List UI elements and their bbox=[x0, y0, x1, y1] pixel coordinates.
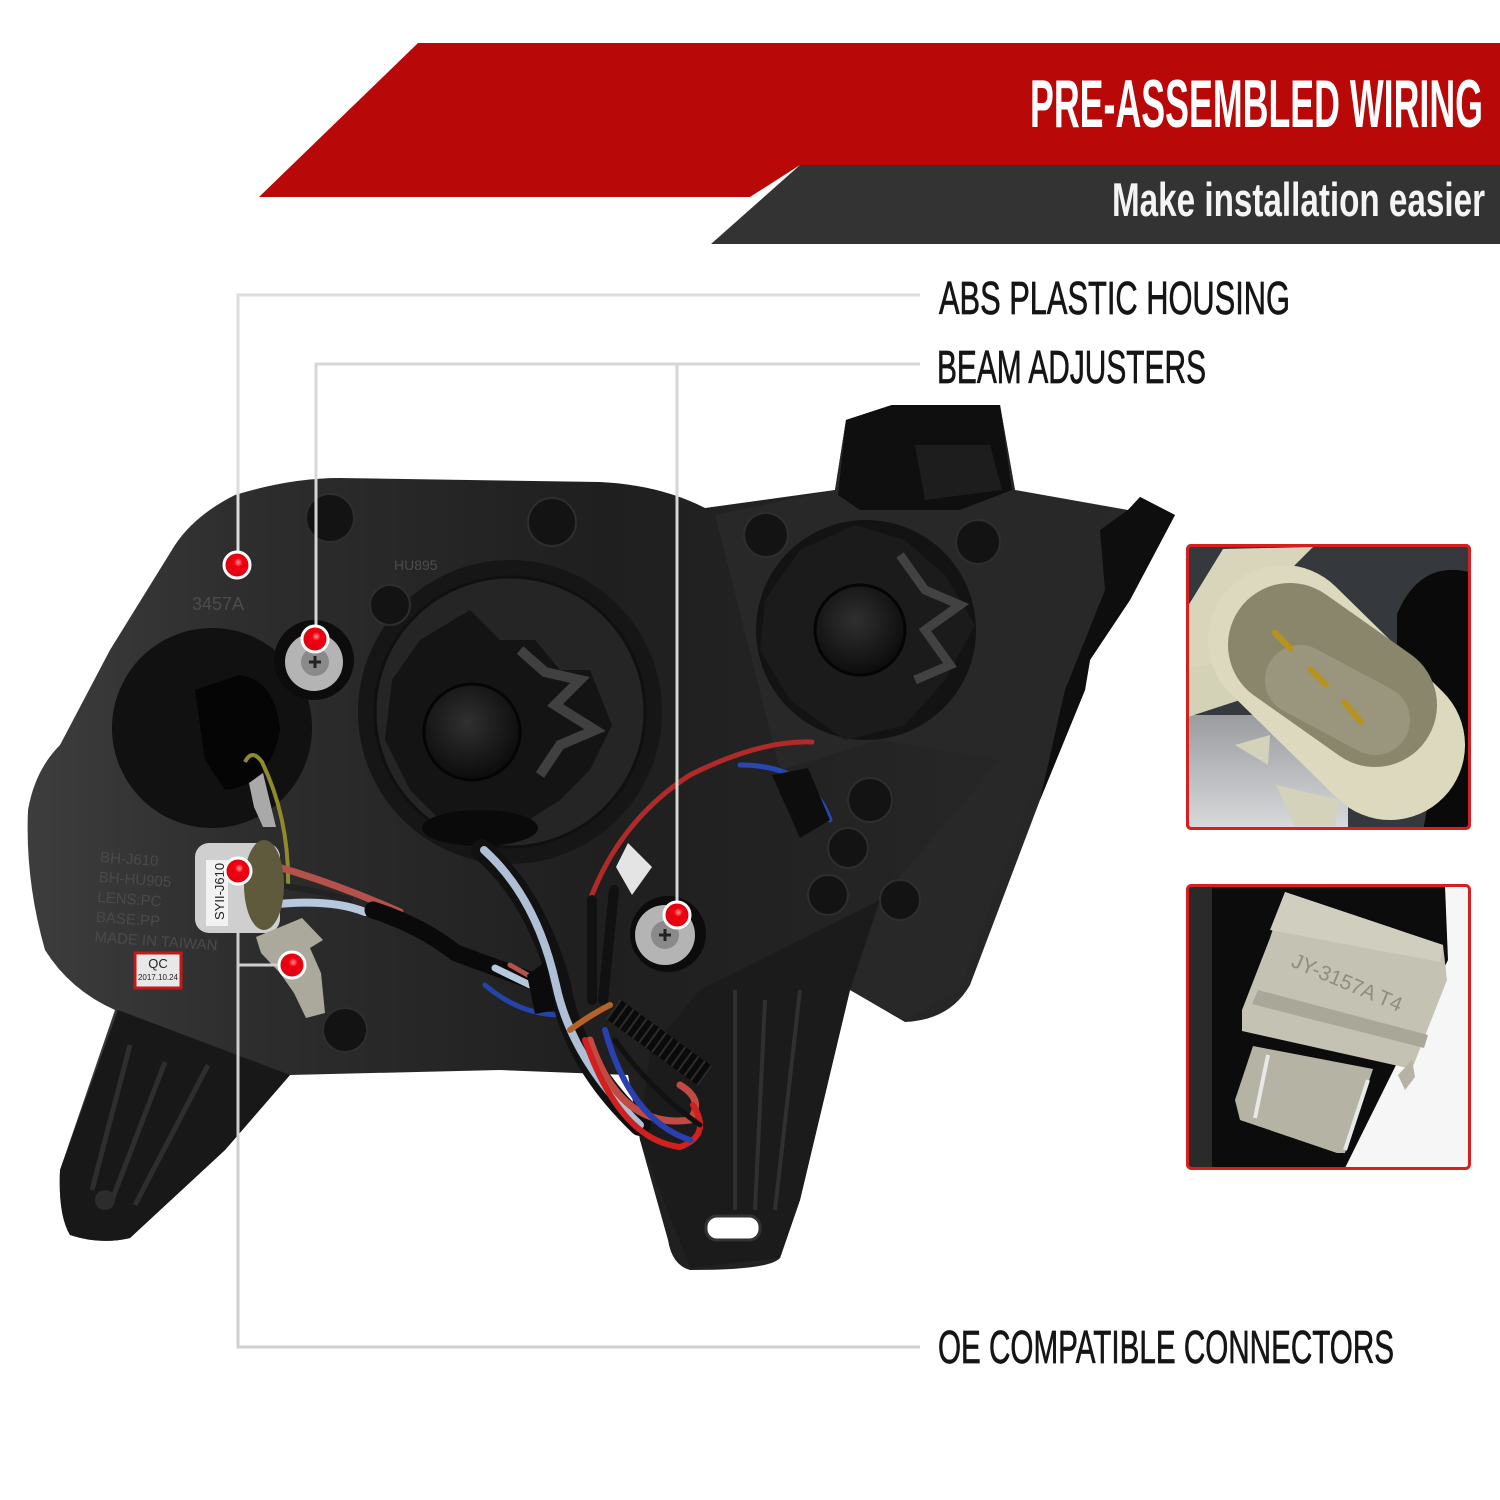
wire tag bbox=[616, 843, 652, 895]
QC sticker bbox=[135, 953, 181, 988]
leader line: connectors bbox=[238, 872, 920, 1347]
bracket inner face bbox=[915, 445, 1002, 500]
banner: dark subtitle band bbox=[711, 165, 1500, 244]
upper adjuster screw bbox=[274, 620, 354, 700]
engraved housing text: BH-J610 bbox=[100, 849, 159, 870]
connector cluster bbox=[527, 962, 556, 1014]
inset frame bbox=[1188, 546, 1470, 828]
dot: lower adjuster bbox=[664, 902, 690, 928]
engraved housing text bbox=[94, 849, 224, 954]
large hole bbox=[112, 628, 312, 828]
socket connector: SYII-J610 bbox=[212, 863, 227, 920]
center mount ribs bbox=[735, 990, 800, 1210]
dot: upper adjuster bbox=[302, 626, 328, 652]
dot: housing bbox=[224, 552, 250, 578]
label: housing: ABS PLASTIC HOUSING bbox=[939, 272, 1290, 324]
main lamp ring bbox=[358, 560, 662, 864]
lower adjuster screw bbox=[630, 896, 706, 972]
corrugated tube bbox=[613, 1009, 705, 1076]
bottom mount slot bbox=[706, 1216, 760, 1240]
engraved part number: 3457A bbox=[192, 594, 244, 614]
housing silhouette bbox=[28, 405, 1175, 1270]
leader line: housing bbox=[238, 295, 920, 565]
dot: socket bbox=[225, 858, 251, 884]
left mount foot bbox=[60, 1010, 290, 1241]
right housing block bbox=[715, 405, 1105, 1020]
QC sticker: 2017.10.24 bbox=[138, 973, 179, 982]
right dark edge bbox=[1040, 497, 1175, 800]
socket lower body bbox=[1235, 1046, 1373, 1153]
connector rim bbox=[1283, 640, 1390, 745]
label: beam adjusters: BEAM ADJUSTERS bbox=[937, 341, 1206, 393]
lower dark ledge bbox=[640, 900, 880, 1268]
engraved housing text: BH-HU905 bbox=[98, 869, 172, 891]
engraved housing text: BASE:PP bbox=[95, 909, 161, 930]
housing posts bbox=[306, 494, 1000, 1052]
pins bbox=[1275, 633, 1361, 722]
inset background bbox=[1188, 546, 1469, 828]
connector cavity bbox=[1290, 645, 1375, 705]
wiring harness bbox=[268, 742, 830, 1147]
zip tie bbox=[570, 1005, 610, 1030]
socket connector bbox=[195, 840, 284, 933]
connector tabs bbox=[1189, 547, 1313, 669]
marker dots bbox=[224, 552, 690, 978]
socket upper body bbox=[1242, 892, 1447, 1069]
hole socket bbox=[195, 675, 280, 790]
banner: red title band bbox=[259, 43, 1500, 197]
inset: three pin connector bbox=[1186, 544, 1471, 830]
connector relay bbox=[772, 768, 830, 838]
inset background bbox=[1346, 887, 1468, 1167]
headlight housing photo bbox=[28, 405, 1175, 1270]
yellow wire bbox=[245, 755, 288, 890]
main lamp cap bbox=[385, 610, 612, 835]
leader line: adjusters bbox=[316, 364, 920, 915]
inset frame bbox=[1188, 886, 1470, 1168]
engraved housing text: MADE IN TAIWAN bbox=[94, 929, 218, 954]
engraved housing text: LENS:PC bbox=[97, 889, 162, 910]
second lamp cap bbox=[756, 520, 976, 740]
dot: small socket bbox=[279, 952, 305, 978]
rear grommet bbox=[422, 810, 538, 846]
small bulb socket bbox=[256, 918, 325, 1018]
engraved model: HU895 bbox=[394, 557, 438, 573]
socket side tab bbox=[1398, 1060, 1415, 1090]
inset: bulb socket bbox=[1186, 884, 1471, 1170]
left mount hole bbox=[95, 1190, 115, 1210]
moulded part number: JY-3157A T4 bbox=[1288, 949, 1406, 1017]
socket contacts bbox=[1255, 1055, 1368, 1150]
wire tag near socket bbox=[249, 773, 276, 827]
QC sticker: QC bbox=[148, 956, 168, 971]
top bracket bbox=[838, 405, 1012, 510]
